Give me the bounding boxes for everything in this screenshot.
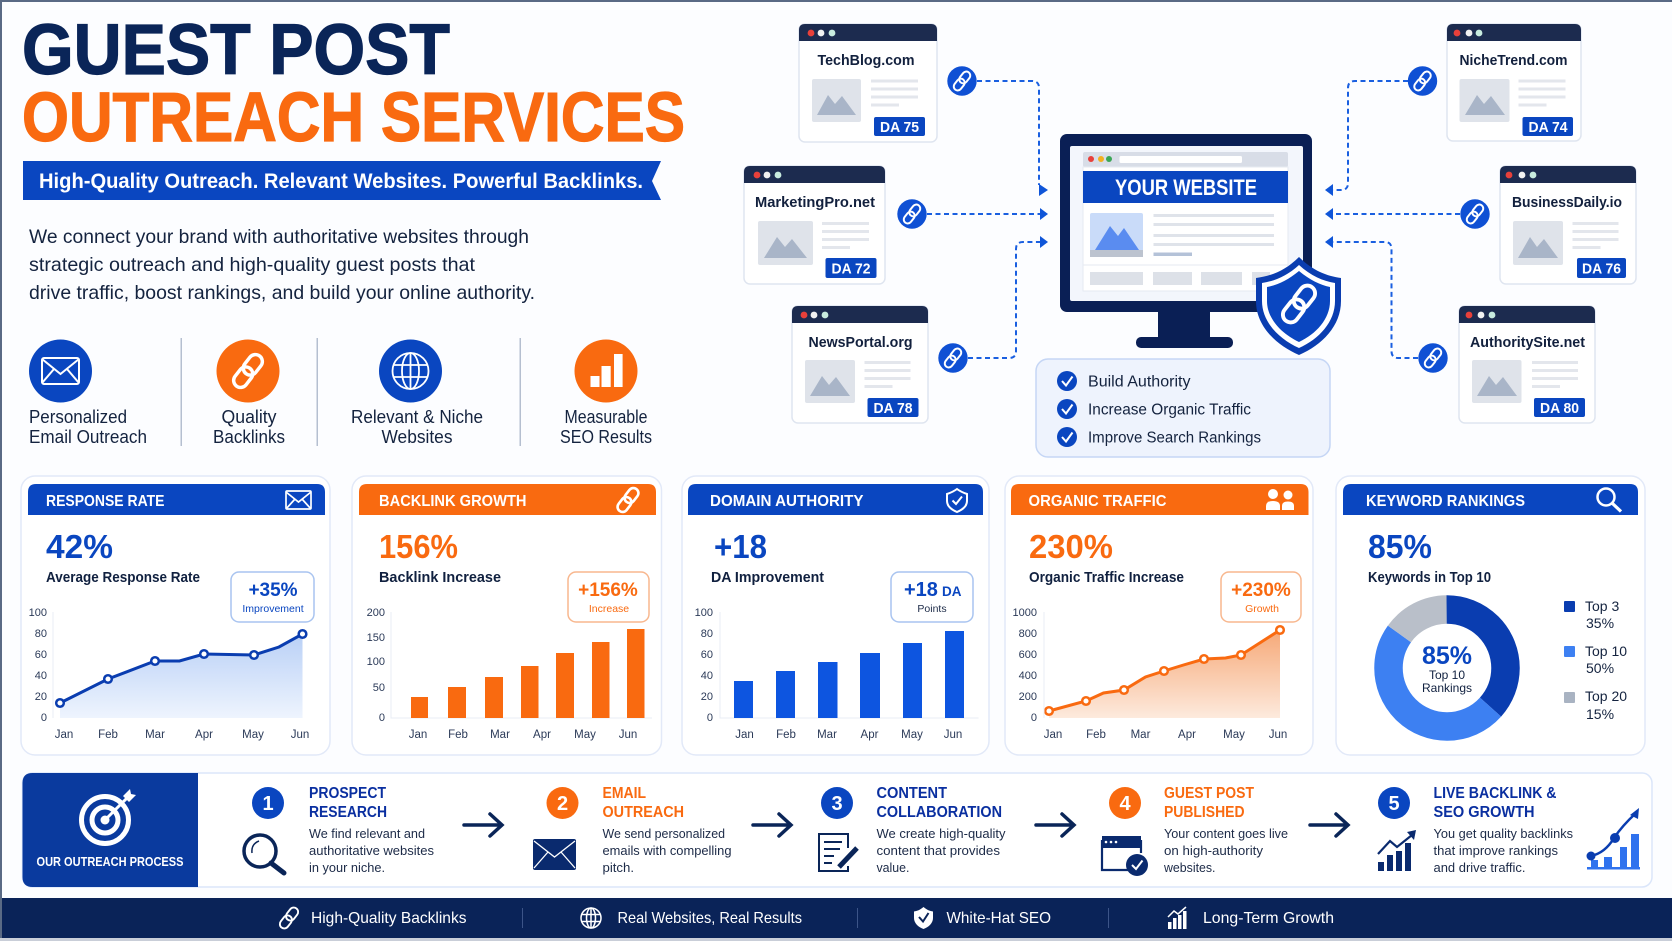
step 3: content collaboration: 3 xyxy=(831,793,843,815)
callout: Growth xyxy=(1245,603,1279,615)
callout: +35% xyxy=(248,580,298,601)
callout xyxy=(891,572,973,622)
callout xyxy=(568,572,649,622)
legend: Top 10 xyxy=(1585,643,1627,659)
panel: response rate: RESPONSE RATE xyxy=(46,493,164,510)
site card: NewsPortal.org xyxy=(792,306,928,423)
bar chart: May xyxy=(574,729,596,741)
feature: quality backlinks: Backlinks xyxy=(213,427,285,447)
bar chart: 40 xyxy=(701,670,713,682)
feature: relevant and niche websites: Websites xyxy=(382,427,452,447)
bar chart: 60 xyxy=(701,649,713,661)
feature: quality backlinks xyxy=(213,340,285,447)
donut chart: Rankings xyxy=(1422,681,1472,695)
title: OUTREACH SERVICES xyxy=(22,78,685,156)
bar chart: Apr xyxy=(533,729,551,741)
panel: keyword rankings: Keywords in Top 10 xyxy=(1368,569,1491,586)
area chart: 800 xyxy=(1019,628,1037,640)
area chart: May xyxy=(1223,729,1245,741)
step 2: email outreach: emails with compelling xyxy=(602,843,732,858)
bar chart xyxy=(367,607,652,741)
legend: 15% xyxy=(1586,706,1614,722)
step 4: guest post published xyxy=(1102,785,1288,876)
bar chart: Jan xyxy=(409,729,427,741)
link badges xyxy=(897,66,1490,373)
panel: response rate: Average Response Rate xyxy=(46,569,200,586)
panel: domain authority xyxy=(682,476,989,755)
area chart xyxy=(29,607,309,741)
area chart: 0 xyxy=(1031,712,1037,724)
step 4: guest post published: on high-authority xyxy=(1164,843,1264,858)
site card: NicheTrend.com: NicheTrend.com xyxy=(1460,52,1568,69)
panel: keyword rankings xyxy=(1336,476,1645,755)
arrow xyxy=(1036,814,1074,836)
feature: relevant and niche websites: Relevant & Niche xyxy=(351,407,483,427)
panel: outreach process xyxy=(22,773,1652,887)
icon: link xyxy=(616,486,640,514)
step 1: prospect research: 1 xyxy=(262,793,274,815)
bar chart: Feb xyxy=(448,729,468,741)
site card: MarketingPro.net: DA 72 xyxy=(832,262,870,278)
step 3: content collaboration: value. xyxy=(876,860,910,875)
feature: measurable seo results: Measurable xyxy=(564,407,648,427)
feature: measurable seo results: SEO Results xyxy=(560,427,652,447)
area chart: Mar xyxy=(145,729,165,741)
connector arrows xyxy=(927,81,1460,358)
callout: +18 xyxy=(904,579,938,601)
arrow xyxy=(464,814,502,836)
site card: NewsPortal.org: NewsPortal.org xyxy=(808,334,912,351)
donut chart: Top 10 xyxy=(1429,668,1465,682)
area chart: May xyxy=(242,729,264,741)
panel: response rate: 42% xyxy=(46,528,113,565)
feature: personalized email outreach: Email Outreach xyxy=(29,427,147,447)
step 1: prospect research: RESEARCH xyxy=(309,804,387,821)
arrow xyxy=(1310,814,1348,836)
area chart xyxy=(1013,607,1287,741)
area chart: 600 xyxy=(1019,649,1037,661)
step 1: prospect research: PROSPECT xyxy=(309,785,386,802)
step 2: email outreach xyxy=(533,785,732,875)
panel: keyword rankings: KEYWORD RANKINGS xyxy=(1366,493,1525,510)
bar chart: 50 xyxy=(373,682,385,694)
site card: BusinessDaily.io: BusinessDaily.io xyxy=(1512,194,1622,211)
bar chart: 0 xyxy=(379,712,385,724)
arrow xyxy=(753,814,791,836)
benefits checklist: Increase Organic Traffic xyxy=(1088,402,1251,418)
footer: white-hat seo: White-Hat SEO xyxy=(946,910,1051,927)
bar chart: 150 xyxy=(367,632,385,644)
process label xyxy=(22,773,198,887)
benefits checklist: Build Authority xyxy=(1088,374,1191,390)
icon: people xyxy=(1266,489,1294,510)
bar chart: Mar xyxy=(817,729,837,741)
benefits checklist xyxy=(1036,359,1330,457)
step 3: content collaboration: COLLABORATION xyxy=(876,804,1002,821)
area chart: Feb xyxy=(1086,729,1106,741)
step 1: prospect research: We find relevant and xyxy=(309,826,425,841)
step 4: guest post published: GUEST POST xyxy=(1164,785,1254,802)
monitor: your website xyxy=(1060,134,1312,348)
icon: shield with link xyxy=(1256,257,1341,355)
panel: organic traffic xyxy=(1005,476,1313,755)
callout: Increase xyxy=(589,603,629,615)
site card: BusinessDaily.io: DA 76 xyxy=(1582,262,1621,278)
step 5: live backlink and seo growth: You get quality backlinks xyxy=(1434,826,1573,841)
step 5: live backlink and seo growth: SEO GROWTH xyxy=(1434,804,1534,821)
step 2: email outreach: We send personalized xyxy=(602,826,725,841)
step 5: live backlink and seo growth: that improve rankings xyxy=(1434,843,1559,858)
area chart: 60 xyxy=(35,649,47,661)
feature: quality backlinks: Quality xyxy=(222,407,276,427)
footer: white-hat seo xyxy=(914,907,1051,929)
site card: MarketingPro.net xyxy=(744,166,885,284)
icon: magnifier xyxy=(1598,488,1621,512)
step 2: email outreach: 2 xyxy=(557,793,568,815)
bar chart: Jun xyxy=(619,729,637,741)
process label: OUR OUTREACH PROCESS xyxy=(36,855,184,869)
callout: Improvement xyxy=(242,603,304,615)
bar chart: 80 xyxy=(701,628,713,640)
bar chart: 100 xyxy=(367,656,385,668)
area chart: Apr xyxy=(195,729,213,741)
step 1: prospect research xyxy=(244,785,434,875)
site card: TechBlog.com: DA 75 xyxy=(880,120,919,136)
area chart: Mar xyxy=(1131,729,1151,741)
area chart: Jun xyxy=(291,729,309,741)
step 3: content collaboration xyxy=(819,785,1006,875)
step 3: content collaboration: We create high-quality xyxy=(876,826,1006,841)
bar chart: 200 xyxy=(367,607,385,619)
feature: personalized email outreach: Personalized xyxy=(29,407,127,427)
area chart: Jan xyxy=(1044,729,1062,741)
site card: MarketingPro.net: MarketingPro.net xyxy=(755,194,875,211)
area chart: 1000 xyxy=(1013,607,1037,619)
intro paragraph: We connect your brand with authoritative websites through xyxy=(29,226,529,248)
area chart: 80 xyxy=(35,628,47,640)
panel: domain authority: DOMAIN AUTHORITY xyxy=(710,493,864,510)
panel: backlink growth: Backlink Increase xyxy=(379,569,501,586)
site card: NewsPortal.org: DA 78 xyxy=(874,401,912,417)
step 4: guest post published: Your content goes live xyxy=(1164,826,1288,841)
area chart: Jan xyxy=(55,729,73,741)
site card: TechBlog.com xyxy=(799,24,937,142)
feature: measurable seo results xyxy=(560,340,652,447)
step 5: live backlink and seo growth: 5 xyxy=(1388,793,1400,815)
step 5: live backlink and seo growth xyxy=(1378,785,1573,875)
title xyxy=(22,11,685,156)
step 4: guest post published: 4 xyxy=(1119,793,1131,815)
area chart: 200 xyxy=(1019,691,1037,703)
area chart: 0 xyxy=(41,712,47,724)
area chart: Apr xyxy=(1178,729,1196,741)
intro paragraph: drive traffic, boost rankings, and build your online authority. xyxy=(29,282,535,304)
footer: high-quality backlinks xyxy=(278,906,466,930)
panel: domain authority: DA Improvement xyxy=(711,569,824,586)
area chart: 100 xyxy=(29,607,47,619)
area chart: 20 xyxy=(35,691,47,703)
bar chart: May xyxy=(901,729,923,741)
panel: keyword rankings: 85% xyxy=(1368,528,1432,565)
step 2: email outreach: OUTREACH xyxy=(602,804,684,821)
tagline ribbon xyxy=(23,161,661,200)
panel: response rate xyxy=(21,476,330,755)
panel: organic traffic: ORGANIC TRAFFIC xyxy=(1028,493,1166,510)
panel: backlink growth: 156% xyxy=(379,528,458,565)
legend: Top 20 xyxy=(1585,688,1627,704)
panel: organic traffic: Organic Traffic Increase xyxy=(1029,569,1184,586)
legend: Top 3 xyxy=(1585,598,1619,614)
step 1: prospect research: authoritative websites xyxy=(309,843,434,858)
footer: real websites: Real Websites, Real Results xyxy=(618,910,802,927)
bar chart: 0 xyxy=(707,712,713,724)
step 2: email outreach: pitch. xyxy=(602,860,634,875)
footer: real websites xyxy=(581,908,802,928)
footer: long-term growth: Long-Term Growth xyxy=(1203,910,1334,927)
bar chart: Feb xyxy=(776,729,796,741)
panel: organic traffic: 230% xyxy=(1029,528,1113,565)
site card: NicheTrend.com xyxy=(1447,24,1581,141)
callout: +230% xyxy=(1231,580,1291,601)
feature: personalized email outreach xyxy=(29,340,147,447)
area chart: Feb xyxy=(98,729,118,741)
area chart: 40 xyxy=(35,670,47,682)
site card: AuthoritySite.net: DA 80 xyxy=(1540,401,1579,417)
panel: backlink growth: BACKLINK GROWTH xyxy=(379,493,526,510)
bar chart: Mar xyxy=(490,729,510,741)
intro paragraph: strategic outreach and high-quality guest posts that xyxy=(29,254,476,276)
callout xyxy=(231,572,314,622)
donut chart xyxy=(1388,610,1506,726)
step 1: prospect research: in your niche. xyxy=(309,860,385,875)
step 3: content collaboration: content that provides xyxy=(876,843,1000,858)
site card: NicheTrend.com: DA 74 xyxy=(1528,120,1568,136)
icon: envelope xyxy=(286,491,311,509)
site card: AuthoritySite.net: AuthoritySite.net xyxy=(1470,334,1585,351)
bar chart: 20 xyxy=(701,691,713,703)
legend xyxy=(1564,598,1627,722)
callout: Points xyxy=(917,603,947,615)
panel: domain authority: +18 xyxy=(714,528,767,565)
step 5: live backlink and seo growth: and drive traffic. xyxy=(1434,860,1526,875)
callout xyxy=(1221,572,1301,622)
area chart: Jun xyxy=(1269,729,1287,741)
site card: BusinessDaily.io xyxy=(1500,166,1636,284)
icon: shield check xyxy=(947,489,967,512)
site card: AuthoritySite.net xyxy=(1459,306,1595,423)
panel: backlink growth xyxy=(352,476,662,755)
step 4: guest post published: PUBLISHED xyxy=(1164,804,1244,821)
title: GUEST POST xyxy=(22,11,450,90)
step 2: email outreach: EMAIL xyxy=(602,785,646,802)
bar chart: Apr xyxy=(861,729,879,741)
footer: long-term growth xyxy=(1168,907,1334,929)
footer: high-quality backlinks: High-Quality Backlinks xyxy=(311,910,466,927)
feature: relevant and niche websites xyxy=(351,340,483,447)
site card: TechBlog.com: TechBlog.com xyxy=(818,52,914,69)
step 5: live backlink and seo growth: LIVE BACKLINK & xyxy=(1434,785,1557,802)
icon: growth chart xyxy=(1586,808,1640,870)
step 4: guest post published: websites. xyxy=(1163,860,1216,875)
donut chart: 85% xyxy=(1422,642,1472,670)
area chart: 400 xyxy=(1019,670,1037,682)
tagline ribbon: High-Quality Outreach. Relevant Websites. Powerful Backlinks. xyxy=(39,170,643,193)
bar chart xyxy=(695,607,978,741)
callout: +156% xyxy=(578,580,638,601)
legend: 50% xyxy=(1586,660,1614,676)
benefits checklist: Improve Search Rankings xyxy=(1088,430,1261,446)
callout: DA xyxy=(942,584,962,599)
legend: 35% xyxy=(1586,615,1614,631)
monitor: your website: YOUR WEBSITE xyxy=(1115,175,1257,200)
step 3: content collaboration: CONTENT xyxy=(876,785,947,802)
intro paragraph xyxy=(29,226,535,304)
bar chart: Jun xyxy=(944,729,962,741)
bar chart: 100 xyxy=(695,607,713,619)
bar chart: Jan xyxy=(735,729,754,741)
footer bar xyxy=(0,898,1672,941)
